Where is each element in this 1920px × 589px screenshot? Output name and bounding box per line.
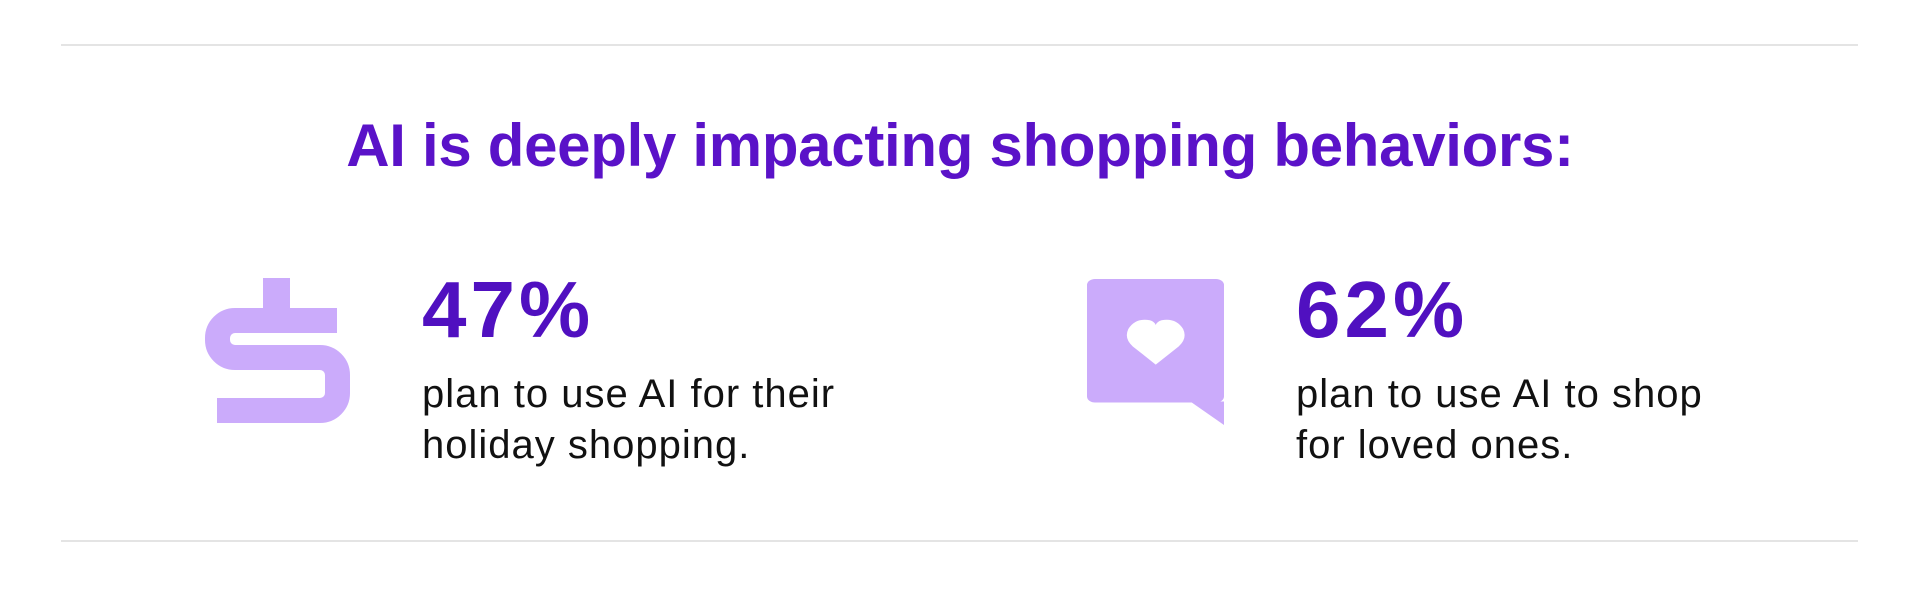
icon: dollar sign: [205, 278, 350, 423]
icon: chat bubble with heart: [1087, 279, 1224, 425]
description: [1296, 372, 1703, 467]
description: plan to use AI to shop: [1296, 372, 1703, 416]
description: plan to use AI for their: [422, 372, 835, 416]
description: for loved ones.: [1296, 423, 1573, 467]
stat number 47%: 47%: [422, 265, 594, 354]
title: AI is deeply impacting shopping behaviors:: [346, 112, 1574, 179]
panel: loved ones stat: [1087, 265, 1703, 467]
description: [422, 372, 835, 467]
description: holiday shopping.: [422, 423, 750, 467]
panel: holiday shopping stat: [205, 265, 835, 467]
stat number 62%: 62%: [1296, 265, 1468, 354]
